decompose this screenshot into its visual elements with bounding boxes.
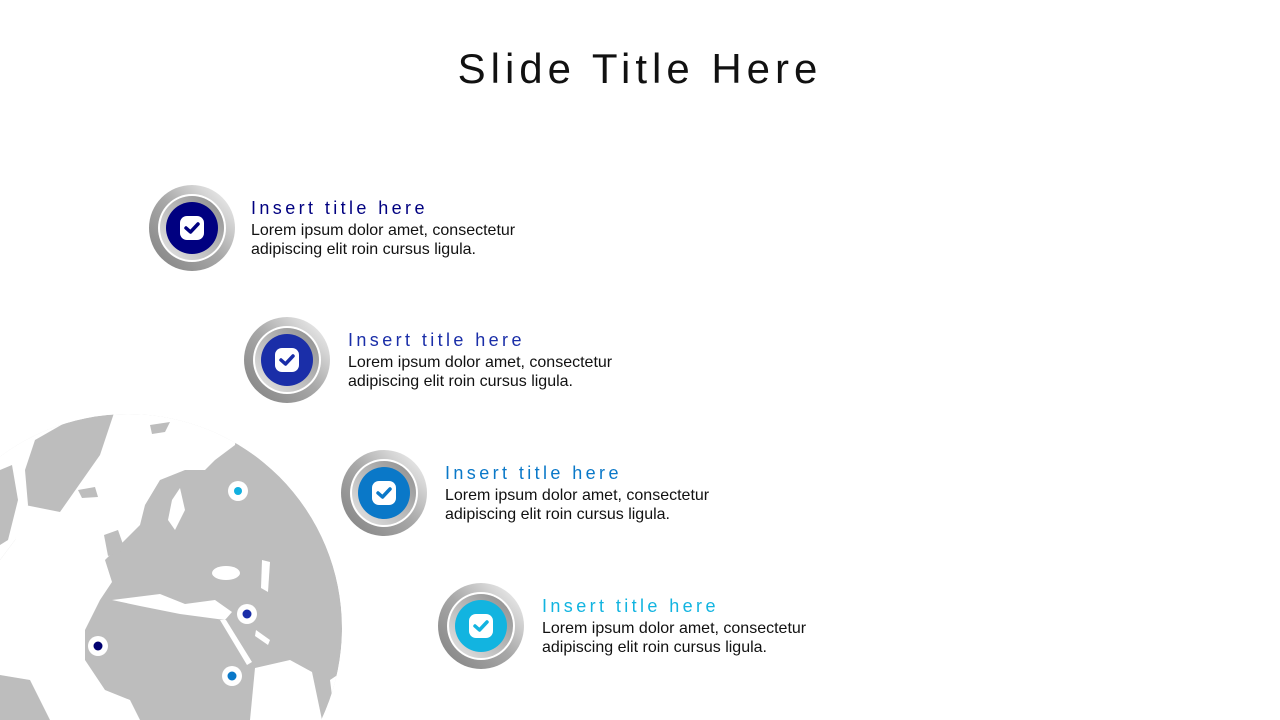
item 3	[341, 450, 709, 536]
text 4: Lorem ipsum dolor amet, consectetur	[542, 620, 806, 637]
text 3: adipiscing elit roin cursus ligula.	[445, 506, 670, 523]
item 1	[149, 185, 515, 271]
text 1: adipiscing elit roin cursus ligula.	[251, 241, 476, 258]
item 4	[438, 583, 806, 669]
icon 2	[244, 317, 330, 403]
text 2: Lorem ipsum dolor amet, consectetur	[348, 354, 612, 371]
text 3	[445, 487, 709, 523]
text 1	[251, 222, 515, 258]
text 2: adipiscing elit roin cursus ligula.	[348, 373, 573, 390]
heading 2: Insert title here	[348, 330, 525, 350]
heading 1: Insert title here	[251, 198, 428, 218]
icon 4	[438, 583, 524, 669]
text 4: adipiscing elit roin cursus ligula.	[542, 639, 767, 656]
map pins	[88, 481, 257, 686]
item 2	[244, 317, 612, 403]
heading 4: Insert title here	[542, 596, 719, 616]
text 3: Lorem ipsum dolor amet, consectetur	[445, 487, 709, 504]
title: Slide Title Here	[458, 45, 822, 92]
heading 3: Insert title here	[445, 463, 622, 483]
globe	[0, 414, 342, 720]
text 2	[348, 354, 612, 390]
text 1: Lorem ipsum dolor amet, consectetur	[251, 222, 515, 239]
text 4	[542, 620, 806, 656]
icon 3	[341, 450, 427, 536]
icon 1	[149, 185, 235, 271]
